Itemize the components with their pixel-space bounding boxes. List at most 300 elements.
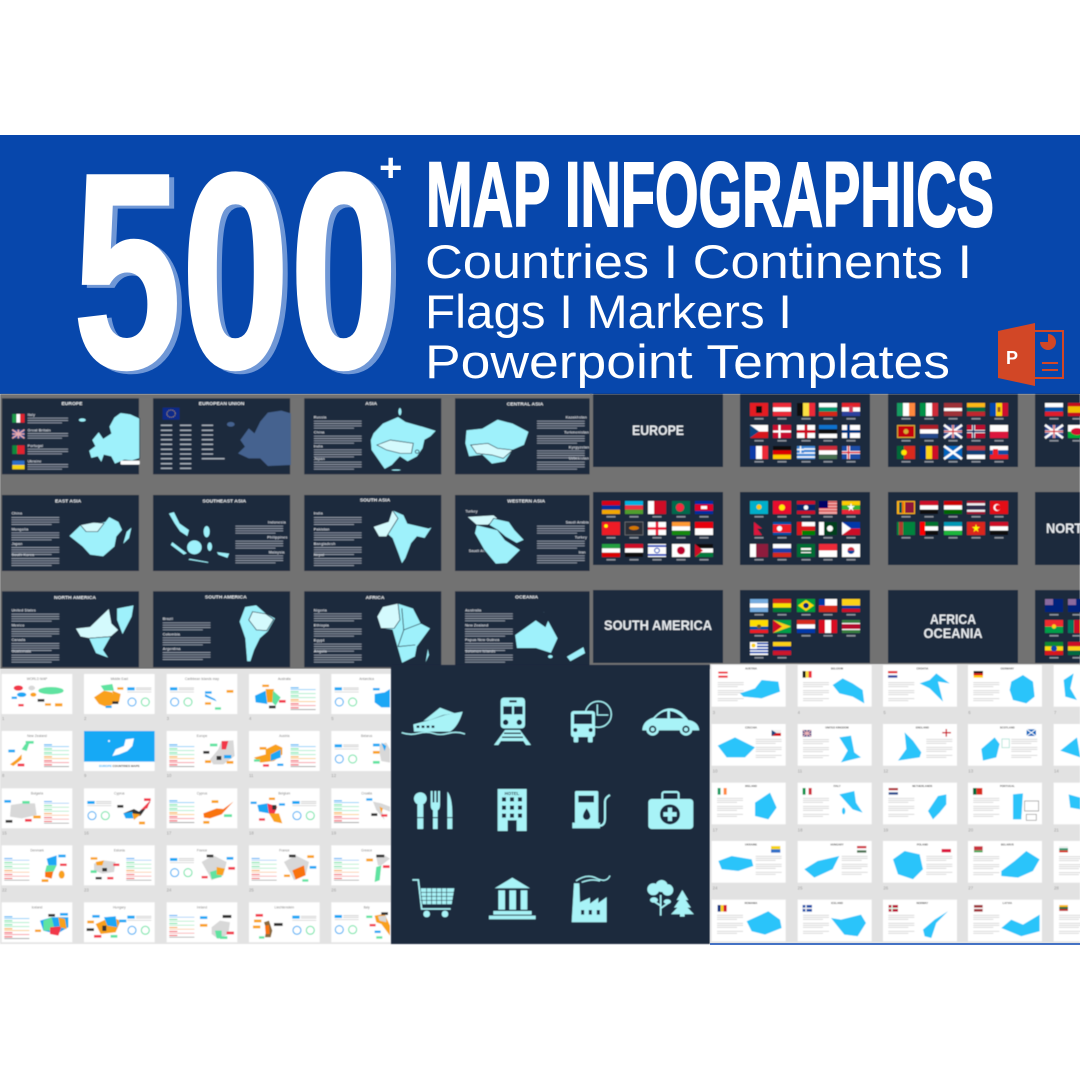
flag Uzbekistan [944, 522, 962, 538]
flag Guyana [773, 620, 791, 636]
slide: Ukraine: UKRAINE [745, 842, 757, 846]
slide: Germany [968, 665, 1042, 707]
flag Serbia [967, 446, 985, 462]
flag Thailand [967, 501, 985, 518]
flag Laos [797, 501, 815, 518]
flag Sri Lanka [897, 501, 915, 518]
slide: Oceania: OCEANIA [515, 595, 539, 599]
slide: Africa: Ethiopia [314, 624, 330, 628]
slide: Belarus [331, 731, 402, 771]
slide: Bulgaria: Bulgaria [31, 791, 43, 795]
slide numbers: 4 [249, 716, 252, 721]
flag Yemen [990, 522, 1008, 538]
flag Norway [967, 425, 985, 442]
slide: Belarus: Belarus [361, 734, 373, 738]
slide: Italy [798, 783, 872, 824]
flag Philippines [842, 522, 860, 538]
slide: Estonia: Estonia [114, 848, 125, 852]
flag Argentina [750, 599, 768, 616]
slide numbers: 4 [798, 710, 801, 715]
slide: Europe: Portugal [28, 444, 43, 448]
panel: cyan country slides [710, 664, 1080, 944]
slide: Europe countries maps divider: EUROPE COUNTRIES MAPS [99, 764, 140, 768]
flag England [797, 425, 815, 442]
slide numbers: 24 [713, 886, 718, 891]
slide: Ukraine [712, 841, 786, 883]
slide: Norway: NORWAY [916, 901, 928, 905]
flag UAE [920, 522, 938, 538]
slide: Europe section title [593, 394, 723, 467]
slide: Belgium [798, 665, 872, 707]
flag Estonia [819, 425, 837, 442]
flag Australia [1045, 599, 1063, 616]
slide: Europe: EUROPE [61, 401, 82, 406]
flag Moldova [990, 403, 1008, 420]
slide: New Zealand [2, 731, 72, 771]
slide: Asia: China [314, 431, 325, 435]
slide: Western Asia: WESTERN ASIA [507, 499, 546, 504]
subtitle line 1: Countries I Continents I [425, 235, 972, 288]
slide: England [883, 724, 957, 766]
slide: South America flags [740, 590, 870, 663]
slide: Italy: ITALY [833, 784, 841, 788]
slide: North America: Mexico [11, 624, 25, 628]
slide: France: France [197, 848, 207, 852]
slide: Middle East [84, 674, 155, 714]
slide: Europe: Italy [28, 413, 35, 417]
slide: South America [153, 591, 290, 667]
slide: Ireland [712, 783, 786, 824]
flag France [750, 446, 768, 462]
slide: Belarus: BELARUS [1001, 842, 1014, 846]
slide numbers: 26 [331, 887, 337, 892]
slide numbers: 13 [968, 769, 974, 774]
slide: South Asia: SOUTH ASIA [360, 498, 391, 503]
slide: Southeast Asia: SOUTHEAST ASIA [202, 499, 247, 504]
slide: Iceland: ICELAND [831, 901, 843, 905]
slide numbers: 17 [713, 827, 718, 832]
flag Belgium [797, 403, 815, 420]
slide numbers: 17 [167, 830, 172, 835]
icon: fuel pump [572, 791, 610, 828]
flag Armenia [602, 501, 620, 518]
slide: Europe: Europe [197, 734, 207, 738]
icon: trees [647, 880, 694, 917]
slide: Europe [167, 731, 237, 771]
slide: Australia [249, 674, 320, 714]
slide numbers: 26 [883, 886, 889, 891]
flag Burkina Faso [1045, 620, 1063, 636]
slide numbers: 10 [713, 769, 718, 774]
slide: Europe: Great Britain [28, 429, 51, 432]
slide numbers: 20 [968, 827, 974, 832]
slide: Europe flags S to W [1035, 394, 1080, 467]
icon: factory [572, 876, 610, 922]
slide: Iceland [2, 902, 72, 942]
slide: Asia: India [314, 445, 324, 448]
slide numbers: 5 [331, 716, 334, 721]
slide: Lithuania [1054, 900, 1080, 941]
slide: Oceania: Papua New Guinea [465, 638, 500, 642]
slide: Norway [883, 900, 957, 941]
flag Cameroon [1068, 620, 1080, 636]
slide: European Union: EUROPEAN UNION [199, 401, 245, 406]
slide numbers: 3 [167, 716, 170, 721]
icon: medical kit [648, 792, 693, 829]
slide numbers: 9 [84, 773, 87, 778]
slide numbers [2, 716, 337, 892]
slide: Bulgaria [2, 788, 72, 828]
slide: Liechtenstein [249, 902, 320, 942]
panel: colourful white country slides [0, 669, 402, 944]
slide: Oceania and Africa flags [1035, 590, 1080, 663]
flag Bangladesh [672, 501, 690, 518]
slide: Oceania: New Zealand [465, 624, 488, 628]
flag Denmark [773, 425, 791, 442]
flag Northern Ireland [944, 425, 962, 442]
slide: East Asia: Mongolia [11, 528, 29, 531]
flag Tajikistan [944, 501, 962, 518]
slide: Europe section title: EUROPE [632, 422, 684, 438]
flag Hungary [819, 446, 837, 462]
flag Italy [920, 403, 938, 420]
flag China [602, 522, 620, 538]
slide numbers: 23 [84, 887, 89, 892]
slide: Africa Oceania section title: OCEANIA [924, 625, 982, 641]
blue rule [710, 943, 1080, 945]
slide numbers: 1 [2, 716, 5, 721]
slide: Africa Oceania section title: AFRICA [930, 611, 976, 627]
slide: Antarctica [331, 674, 402, 714]
panel: flag slides [590, 394, 1080, 669]
slide: East Asia: EAST ASIA [55, 499, 82, 504]
slide: Central Asia: Kazakhstan [566, 416, 587, 419]
slide: Europe flags A to I [740, 394, 870, 467]
slide: Croatia [883, 665, 957, 707]
slide: France [167, 845, 237, 885]
slide: World map: WORLD MAP [27, 677, 48, 681]
flag Kyrgyzstan [773, 501, 791, 518]
slide: Italy: Italy [364, 905, 370, 909]
slide: England: ENGLAND [916, 725, 929, 729]
flag Turkmenistan [897, 522, 915, 538]
slide: Asia: ASIA [365, 401, 378, 406]
flag Iran [602, 544, 620, 560]
flag Lithuania [967, 403, 985, 420]
slide: Central Asia: Kyrgyzstan [569, 446, 589, 449]
slide numbers: 12 [331, 773, 337, 778]
slide: United Kingdom: UNITED KINGDOM [825, 725, 850, 729]
slide: Iceland [798, 900, 872, 941]
slide: East Asia: Japan [11, 542, 23, 546]
header banner [0, 115, 1080, 429]
flag Russia [773, 544, 791, 560]
slide: Iceland: Iceland [32, 905, 43, 909]
slide: Southeast Asia: Indonesia [268, 521, 287, 524]
slide: Scotland [968, 724, 1042, 766]
slide: Portugal [968, 783, 1042, 824]
flag Peru [819, 620, 837, 636]
flag India [672, 522, 690, 538]
slide numbers: 7 [1054, 710, 1057, 715]
slide: Italy [331, 902, 402, 942]
flag Oman [797, 522, 815, 538]
slide: Liechtenstein: Liechtenstein [274, 905, 294, 909]
slide: Ireland: IRELAND [745, 784, 757, 788]
slide numbers: 25 [249, 887, 254, 892]
flag Cyprus [625, 522, 643, 538]
slide: North America section title [1035, 492, 1080, 565]
slide: Asia: Russia [314, 416, 327, 419]
flag Jordan [695, 544, 713, 560]
flag Cambodia [695, 501, 713, 518]
flag Scotland [944, 446, 962, 462]
slide: East Asia: China [11, 512, 23, 516]
icon: hotel: HOTEL [505, 791, 520, 796]
slide: Middle East: Middle East [111, 677, 128, 681]
flag Chile [819, 599, 837, 616]
slide numbers: 2 [84, 716, 87, 721]
slide numbers: 28 [1054, 886, 1059, 891]
slide: South America: Argentina [163, 647, 182, 651]
slide: North America: Guatemala [11, 650, 32, 654]
slide: Hungary: HUNGARY [830, 842, 844, 846]
flag Colombia [842, 599, 860, 616]
flag Brazil [797, 599, 815, 616]
number 500 with shadow: 500 [78, 118, 403, 429]
flag Paraguay [797, 620, 815, 636]
slide: Netherlands: NETHERLANDS [912, 784, 933, 788]
slide: Greece: Greece [361, 848, 372, 852]
flag Germany [773, 446, 791, 462]
slide: Ireland [167, 902, 237, 942]
flag Spain [1068, 403, 1080, 420]
slide: Latvia: LATVIA [1003, 901, 1012, 905]
panel: continent map slides [0, 394, 592, 669]
slide: Central Asia [455, 398, 590, 474]
slide: Denmark [1054, 665, 1080, 707]
flag Bolivia [773, 599, 791, 616]
slide: East Asia [2, 495, 139, 571]
slide: Africa: Angola [314, 650, 328, 654]
flag Greece [797, 446, 815, 462]
slide: Belarus [968, 841, 1042, 883]
slide: France regions: France [279, 848, 290, 852]
slide: Antarctica: Antarctica [359, 677, 374, 681]
slide: Asia flags S to Y [888, 492, 1018, 565]
slide: Northern Ireland [1054, 724, 1080, 766]
flag Bahrain [648, 501, 666, 518]
slide: Poland [883, 841, 957, 883]
slide: Southeast Asia: Philippines [267, 536, 287, 540]
flag North Korea [773, 522, 791, 538]
slide: Southeast Asia [153, 495, 290, 571]
slide: World map [2, 674, 72, 714]
slide: Western Asia: Turkey [465, 510, 478, 514]
slide: Denmark: Denmark [30, 848, 44, 852]
flag New Zealand [1068, 599, 1080, 616]
slide numbers: 18 [249, 830, 254, 835]
flag Iraq [625, 544, 643, 560]
slide: Czech Republic [712, 724, 786, 766]
slide: Asia: Japan [314, 457, 325, 461]
slide numbers [713, 710, 1059, 891]
slide: Western Asia [455, 495, 590, 571]
slide: North America: United States [11, 609, 36, 613]
flag Latvia [944, 403, 962, 420]
slide: Croatia [331, 788, 402, 828]
slide: Belgium: BELGIUM [831, 666, 844, 670]
slide: Africa [304, 591, 441, 667]
slide: North America: Canada [11, 638, 26, 642]
icon: ship [402, 708, 465, 734]
icon: car [642, 708, 699, 736]
flag Qatar [750, 544, 768, 560]
slide: Estonia [84, 845, 155, 885]
slide: Romania: ROMANIA [745, 901, 757, 905]
slide numbers: 11 [798, 769, 803, 774]
slide: Africa Oceania section title [888, 590, 1018, 663]
slide: South America: SOUTH AMERICA [205, 595, 247, 599]
flag Ethiopia [1045, 642, 1063, 658]
flag South Korea [842, 544, 860, 560]
slide numbers: 25 [798, 886, 803, 891]
slide: Greece [331, 845, 402, 885]
slide: Caribbean Islands map [167, 674, 237, 714]
slide: Western Asia: Saudi Arabia [566, 521, 590, 524]
slide: European Union [153, 398, 291, 474]
panel: map icons [391, 665, 710, 944]
slide: Asia flags K to S [740, 492, 870, 565]
slide: Africa: AFRICA [366, 595, 385, 600]
slide numbers: 27 [968, 886, 974, 891]
slide: South America section title: SOUTH AMERICA [604, 617, 712, 633]
slide: Latvia [968, 900, 1042, 941]
icon: spoon fork knife [414, 791, 452, 829]
slide numbers: 15 [2, 830, 7, 835]
slide: Oceania: Australia [465, 609, 482, 612]
slide numbers: 24 [167, 887, 172, 892]
slide: Southeast Asia: Malaysia [269, 551, 286, 554]
flag Slovenia [1045, 403, 1063, 420]
subtitle line 3: Powerpoint Templates [425, 335, 950, 388]
flag Wales [1068, 425, 1080, 442]
slide numbers: 12 [883, 769, 889, 774]
flag Vietnam [967, 522, 985, 538]
slide: Portugal: PORTUGAL [1000, 784, 1015, 788]
flag Albania [750, 403, 768, 420]
slide: Oceania: Solomon Islands [465, 650, 496, 654]
slide: Croatia: CROATIA [916, 666, 928, 670]
flag Kazakhstan [750, 501, 768, 518]
icon: powerpoint [998, 323, 1063, 386]
flag Romania [920, 446, 938, 462]
flag Syria [920, 501, 938, 518]
flag Azerbaijan [625, 501, 643, 518]
slide: Central Asia: Uzbekistan [569, 457, 589, 461]
slide: Bulgaria [1054, 841, 1080, 883]
plus sign: + [379, 146, 402, 190]
slide: Australia: Australia [278, 677, 291, 681]
icon: bank [489, 878, 536, 919]
flag Ireland [897, 403, 915, 420]
slide: Hungary: Hungary [113, 905, 126, 909]
slide numbers: 11 [249, 773, 254, 778]
slide: Hungary [84, 902, 155, 942]
slide: Caribbean Islands map: Caribbean Islands map [185, 677, 219, 681]
slide: Western Asia: Turkey [575, 536, 587, 540]
slide: Central Asia: Turkmenistan [564, 431, 589, 435]
subtitle line 2: Flags I Markers I [425, 285, 792, 338]
flag Portugal [897, 446, 915, 462]
slide: South America: Colombia [163, 633, 181, 636]
flag Malaysia [819, 501, 837, 518]
slide: Europe countries maps divider [84, 731, 155, 771]
slide numbers: 14 [1054, 769, 1059, 774]
icon: shopping cart [412, 880, 454, 917]
slide: Africa: Nigeria [314, 609, 328, 612]
slide: South America section title [593, 590, 723, 663]
flag Singapore [819, 544, 837, 560]
slide: Czech Republic: CZECHIA [745, 725, 757, 729]
slide: Croatia: Croatia [361, 791, 372, 795]
slide: Asia [304, 398, 441, 474]
flag Japan [672, 544, 690, 560]
flag Suriname [842, 620, 860, 636]
slide numbers: 5 [883, 710, 886, 715]
slide: Western Asia: Saudi Arabia [469, 549, 493, 553]
slide: Europe: Ukraine [28, 460, 42, 463]
slide: Cyprus: Cyprus [114, 791, 125, 795]
slide: Western Asia: Iran [579, 551, 586, 554]
slide: South Asia: India [314, 512, 324, 516]
slide: Cyprus [84, 788, 155, 828]
flag Georgia [648, 522, 666, 538]
slide: Europe flags I to S [888, 394, 1018, 467]
slide: South Asia [304, 495, 441, 571]
icon: hotel [498, 789, 527, 831]
flag Ecuador [750, 620, 768, 636]
flag Saudi Arabia [797, 544, 815, 560]
flag Turkey [990, 501, 1008, 518]
slide numbers: 10 [167, 773, 172, 778]
slide numbers: 8 [2, 773, 5, 778]
slide: Austria: Austria [279, 734, 290, 738]
flag Finland [842, 425, 860, 442]
icon: bus and clock [571, 701, 611, 742]
slide: Romania [712, 900, 786, 941]
slide: East Asia: South Korea [11, 553, 35, 557]
slide: Spain [1054, 783, 1080, 824]
slide numbers: 22 [2, 887, 7, 892]
slide: France regions [249, 845, 320, 885]
bottom white margin [0, 945, 1080, 1080]
flag Venezuela [773, 642, 791, 658]
slide: South America: Brazil [163, 617, 173, 621]
slide: Africa: Egypt [314, 639, 325, 643]
flag Austria [773, 403, 791, 420]
slide numbers: 16 [84, 830, 89, 835]
flag Netherlands [920, 425, 938, 442]
flag Ghana [1068, 642, 1080, 658]
slide numbers: 19 [883, 827, 889, 832]
slide: Cyprus detail [167, 788, 237, 828]
slide: Hungary [798, 841, 872, 883]
slide: Scotland: SCOTLAND [1000, 725, 1015, 729]
flag Uruguay [750, 642, 768, 658]
flag Bulgaria [819, 403, 837, 420]
slide numbers: 18 [798, 827, 803, 832]
